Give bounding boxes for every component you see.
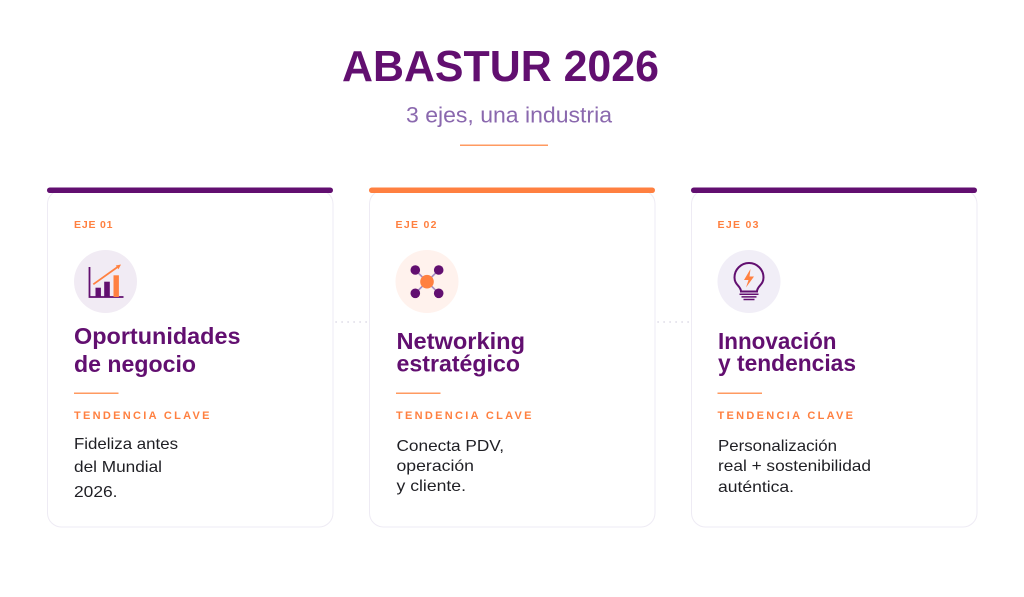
title: ABASTUR 2026 xyxy=(342,42,659,91)
card background xyxy=(48,190,333,527)
body text: del Mundial xyxy=(74,459,162,476)
body text xyxy=(396,438,504,495)
top bar xyxy=(47,188,333,193)
top bar xyxy=(369,188,655,193)
body text: operación xyxy=(396,458,474,475)
connector dots 2 xyxy=(658,321,690,323)
divider xyxy=(718,392,762,394)
heading xyxy=(718,328,856,376)
connector dots 1 xyxy=(336,321,368,323)
top bar xyxy=(691,188,977,193)
heading xyxy=(396,328,525,376)
body text: real + sostenibilidad xyxy=(718,458,871,475)
heading: estratégico xyxy=(396,350,520,376)
body text: Fideliza antes xyxy=(74,436,178,453)
body text: Personalización xyxy=(718,438,837,455)
body text: 2026. xyxy=(74,484,118,501)
heading xyxy=(74,323,240,377)
trend label: TENDENCIA CLAVE xyxy=(74,410,210,422)
heading: Oportunidades xyxy=(74,323,240,349)
icon: network xyxy=(396,250,458,313)
icon: growth chart xyxy=(74,250,137,313)
trend label: TENDENCIA CLAVE xyxy=(396,410,532,422)
body text xyxy=(74,436,178,501)
divider xyxy=(74,392,118,394)
heading: y tendencias xyxy=(718,350,856,376)
panel: eje 02 xyxy=(369,188,655,527)
panel: eje 01 xyxy=(47,188,333,527)
body text: Conecta PDV, xyxy=(396,438,504,455)
body text xyxy=(718,438,871,496)
divider xyxy=(396,392,440,394)
title underline xyxy=(460,144,548,146)
panel: eje 03 xyxy=(691,188,977,527)
heading: de negocio xyxy=(74,351,196,377)
body text: auténtica. xyxy=(718,479,794,496)
heading: Innovación xyxy=(718,328,836,354)
axis label: EJE 01 xyxy=(74,219,113,231)
card background xyxy=(692,190,977,527)
axis label: EJE 02 xyxy=(396,219,437,231)
body text: y cliente. xyxy=(396,478,466,495)
card background xyxy=(370,190,655,527)
icon: light bulb xyxy=(718,250,780,313)
heading: Networking xyxy=(396,328,525,354)
trend label: TENDENCIA CLAVE xyxy=(718,410,853,422)
axis label: EJE 03 xyxy=(718,219,759,231)
subtitle: 3 ejes, una industria xyxy=(406,102,613,128)
